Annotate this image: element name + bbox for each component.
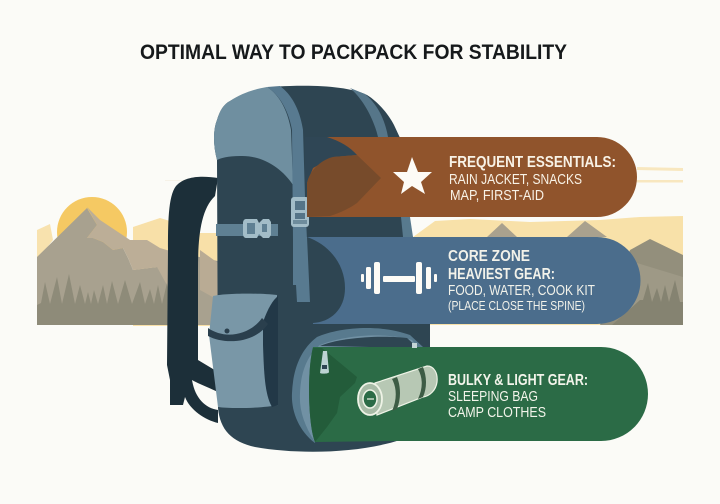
icon: sleeping bag roll xyxy=(358,366,437,415)
pack body xyxy=(214,86,430,452)
core zone text xyxy=(448,248,595,313)
chest strap and buckle xyxy=(216,219,278,238)
backpack xyxy=(167,86,430,452)
front pocket arcs xyxy=(292,328,423,443)
right lid strap xyxy=(350,88,388,137)
bulky gear text xyxy=(448,372,588,421)
shoulder strap xyxy=(167,177,218,423)
top lid light panel xyxy=(214,87,293,185)
bulky gear text: BULKY & LIGHT GEAR: xyxy=(448,372,588,389)
icon: dumbbell xyxy=(361,262,437,294)
frequent essentials text: FREQUENT ESSENTIALS: xyxy=(449,154,616,171)
trees xyxy=(37,274,172,325)
panel: bulky and light gear xyxy=(309,343,648,442)
icon: zipper pull xyxy=(320,351,329,374)
side pocket xyxy=(208,294,278,408)
core zone text: FOOD, WATER, COOK KIT xyxy=(448,283,595,299)
panel: frequent essentials xyxy=(305,137,637,217)
core zone text: (PLACE CLOSE THE SPINE) xyxy=(448,299,585,313)
slate side strip xyxy=(401,217,413,237)
icon: star xyxy=(393,157,432,194)
landscape background xyxy=(37,167,683,326)
core zone text: CORE ZONE xyxy=(448,248,530,265)
frequent essentials text: RAIN JACKET, SNACKS xyxy=(449,172,582,188)
vertical strap xyxy=(267,86,307,240)
bulky gear text: SLEEPING BAG xyxy=(448,389,538,405)
bulky gear text: CAMP CLOTHES xyxy=(448,405,546,421)
panel: core zone xyxy=(293,237,640,324)
title: OPTIMAL WAY TO PACKPACK FOR STABILITY xyxy=(140,41,567,64)
frequent essentials text xyxy=(449,154,616,204)
icon: sun xyxy=(57,197,127,267)
core zone text: HEAVIEST GEAR: xyxy=(448,266,555,283)
frequent essentials text: MAP, FIRST-AID xyxy=(450,188,544,204)
vertical buckle xyxy=(291,197,309,227)
